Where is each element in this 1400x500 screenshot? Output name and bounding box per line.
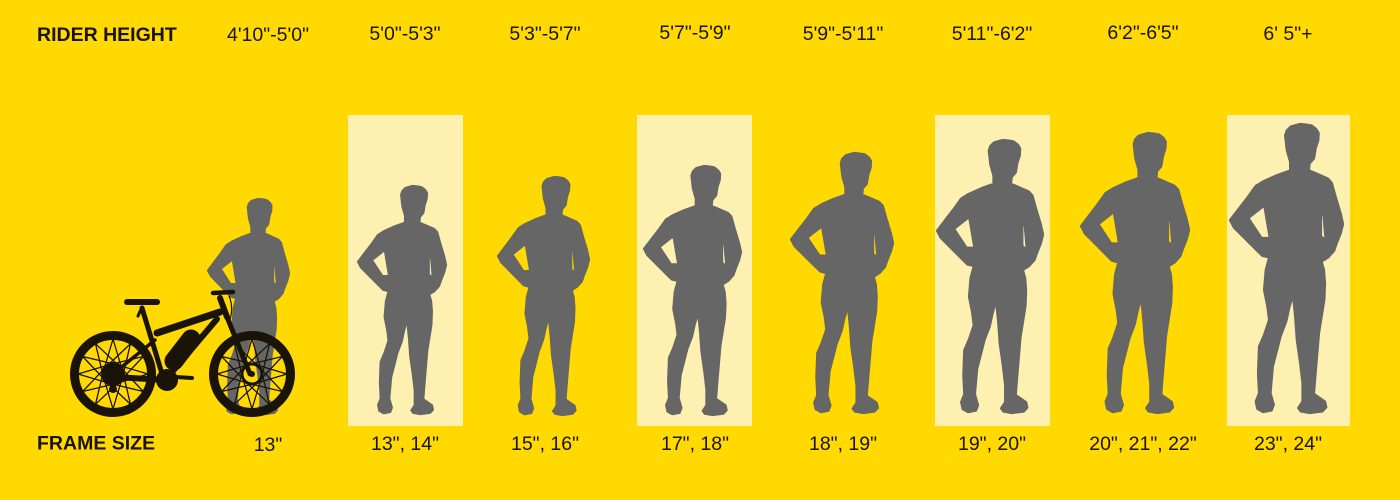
- heading: frame size: FRAME SIZE: [37, 432, 155, 454]
- silhouette: rider 5'7"-5'9": [644, 166, 741, 415]
- silhouette: rider 5'0"-5'3": [358, 186, 446, 415]
- silhouette: rider 6'2"-6'5": [1081, 133, 1189, 413]
- rider height labels: 5'11"-6'2": [952, 23, 1032, 45]
- heading: rider height: RIDER HEIGHT: [37, 24, 177, 46]
- panel: highlight column 5'7"-5'9": [637, 115, 752, 426]
- silhouette: rider 6'5"+: [1230, 124, 1343, 413]
- rider height labels: 4'10"-5'0": [227, 24, 309, 46]
- silhouette: rider 5'11"-6'2": [937, 140, 1043, 413]
- rider height labels: [227, 22, 1313, 46]
- panel: highlight column 5'11"-6'2": [935, 115, 1050, 426]
- frame size labels: 20", 21", 22": [1089, 433, 1197, 455]
- frame size labels: [254, 433, 1322, 456]
- battery: [174, 339, 191, 361]
- motor: [156, 369, 178, 391]
- rider height labels: 5'3"-5'7": [509, 23, 581, 45]
- rider height labels: 5'7"-5'9": [659, 22, 731, 44]
- rear wheel: [74, 336, 152, 412]
- frame size labels: 19", 20": [958, 433, 1026, 455]
- rider height labels: 6' 5"+: [1263, 23, 1313, 45]
- panel: highlight column 6'5"+: [1227, 115, 1350, 426]
- rider height labels: 5'9"-5'11": [803, 23, 883, 45]
- icon: electric bike: [74, 292, 290, 412]
- frame size labels: 17", 18": [661, 433, 729, 455]
- frame size labels: 23", 24": [1254, 433, 1322, 455]
- frame size labels: 13": [254, 434, 282, 456]
- pedal: [176, 377, 192, 378]
- saddle: [127, 299, 157, 305]
- silhouette: rider 5'9"-5'11": [791, 153, 893, 413]
- frame: [113, 292, 250, 380]
- silhouette: rider 5'3"-5'7": [498, 177, 589, 415]
- frame size labels: 13", 14": [371, 433, 439, 455]
- panel: highlight column 5'0"-5'3": [348, 115, 463, 426]
- rider height labels: 5'0"-5'3": [369, 23, 441, 45]
- frame size labels: 15", 16": [511, 433, 579, 455]
- rider height labels: 6'2"-6'5": [1107, 22, 1179, 44]
- front wheel: [214, 336, 290, 412]
- frame size labels: 18", 19": [809, 433, 877, 455]
- silhouette: rider 4'10"-5'0": [207, 198, 290, 415]
